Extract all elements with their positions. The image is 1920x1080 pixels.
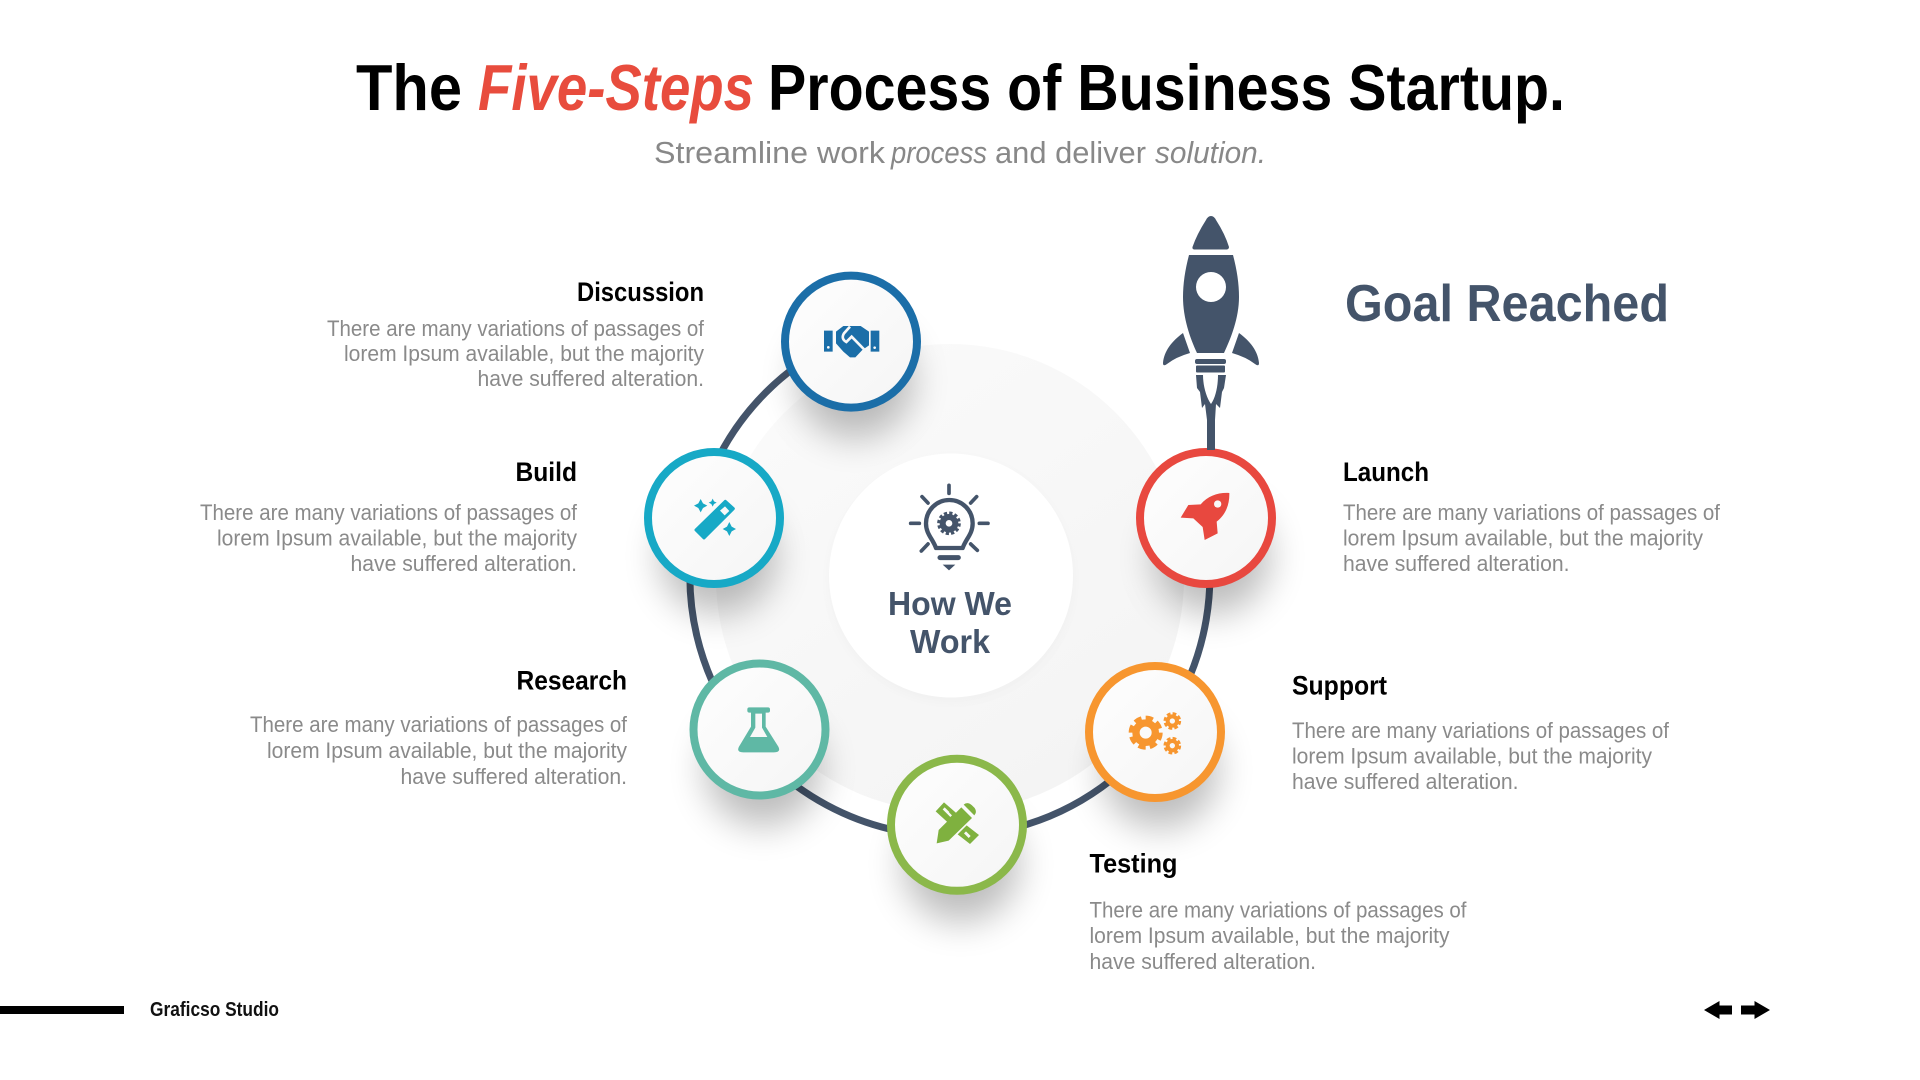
node: research bbox=[694, 664, 826, 826]
text: discussion: have suffered alteration. bbox=[478, 366, 704, 391]
icon: large rocket bbox=[1163, 216, 1259, 450]
text: testing: There are many variations of passages of bbox=[1090, 898, 1467, 922]
node: build bbox=[648, 452, 780, 614]
text: support: There are many variations of passages of bbox=[1292, 718, 1670, 743]
goal reached label: Goal Reached bbox=[1345, 275, 1669, 333]
icon: magic wand bbox=[694, 499, 736, 538]
text: launch: lorem Ipsum available, but the majority bbox=[1343, 526, 1703, 550]
icon: handshake bbox=[824, 326, 879, 357]
connector: launch to rocket bbox=[1207, 410, 1215, 460]
text: research bbox=[250, 666, 628, 789]
text: testing bbox=[1090, 848, 1467, 974]
text: launch bbox=[1343, 457, 1721, 576]
footer brand: Graficso Studio bbox=[150, 999, 279, 1021]
text: launch: Launch bbox=[1343, 457, 1429, 487]
subtitle: Streamline work bbox=[654, 135, 886, 170]
arrow: previous bbox=[1704, 1001, 1732, 1019]
icon: pencil and ruler bbox=[936, 802, 979, 844]
subtitle bbox=[654, 135, 1266, 170]
icon: lightbulb with gear bbox=[911, 485, 988, 570]
text: launch: have suffered alteration. bbox=[1343, 551, 1570, 576]
text: support: lorem Ipsum available, but the majority bbox=[1292, 744, 1652, 768]
footer bar bbox=[0, 1006, 124, 1014]
title bbox=[356, 51, 1565, 124]
text: support bbox=[1292, 670, 1670, 794]
centre hub bbox=[829, 454, 1073, 701]
icon: gears bbox=[1131, 714, 1180, 753]
text: research: have suffered alteration. bbox=[400, 764, 627, 789]
node: launch bbox=[1140, 452, 1272, 614]
central background disc bbox=[716, 344, 1184, 812]
icon: small rocket bbox=[1181, 493, 1229, 540]
text: build: Build bbox=[516, 457, 577, 487]
subtitle: solution. bbox=[1155, 135, 1266, 170]
text: build bbox=[200, 457, 578, 576]
text: testing: have suffered alteration. bbox=[1090, 949, 1316, 974]
text: research: Research bbox=[516, 666, 627, 696]
icon: flask bbox=[738, 707, 779, 752]
text: testing: Testing bbox=[1090, 848, 1178, 878]
hub label: Work bbox=[910, 623, 991, 660]
node: testing bbox=[891, 759, 1023, 922]
text: discussion: lorem Ipsum available, but the majority bbox=[344, 341, 704, 366]
text: discussion: There are many variations of passages of bbox=[327, 316, 705, 341]
text: support: have suffered alteration. bbox=[1292, 769, 1518, 794]
text: build: have suffered alteration. bbox=[350, 551, 577, 576]
node: discussion bbox=[785, 276, 917, 438]
title: Five-Steps bbox=[478, 51, 754, 124]
subtitle: process bbox=[890, 135, 987, 170]
node: support bbox=[1089, 666, 1221, 828]
text: launch: There are many variations of passages of bbox=[1343, 500, 1721, 525]
hub label: How We bbox=[888, 585, 1012, 622]
text: discussion bbox=[327, 277, 705, 391]
subtitle: and deliver bbox=[995, 135, 1146, 170]
title: The bbox=[356, 51, 462, 124]
text: research: There are many variations of passages of bbox=[250, 712, 628, 737]
text: build: There are many variations of passages of bbox=[200, 500, 578, 525]
text: research: lorem Ipsum available, but the majority bbox=[267, 738, 627, 763]
hub label bbox=[888, 585, 1012, 660]
process ring bbox=[690, 336, 1210, 836]
text: support: Support bbox=[1292, 670, 1387, 700]
text: testing: lorem Ipsum available, but the majority bbox=[1090, 923, 1450, 948]
title: Process of Business Startup. bbox=[768, 51, 1565, 124]
text: build: lorem Ipsum available, but the majority bbox=[217, 526, 577, 550]
arrow: next bbox=[1741, 1001, 1770, 1019]
text: discussion: Discussion bbox=[577, 277, 704, 307]
